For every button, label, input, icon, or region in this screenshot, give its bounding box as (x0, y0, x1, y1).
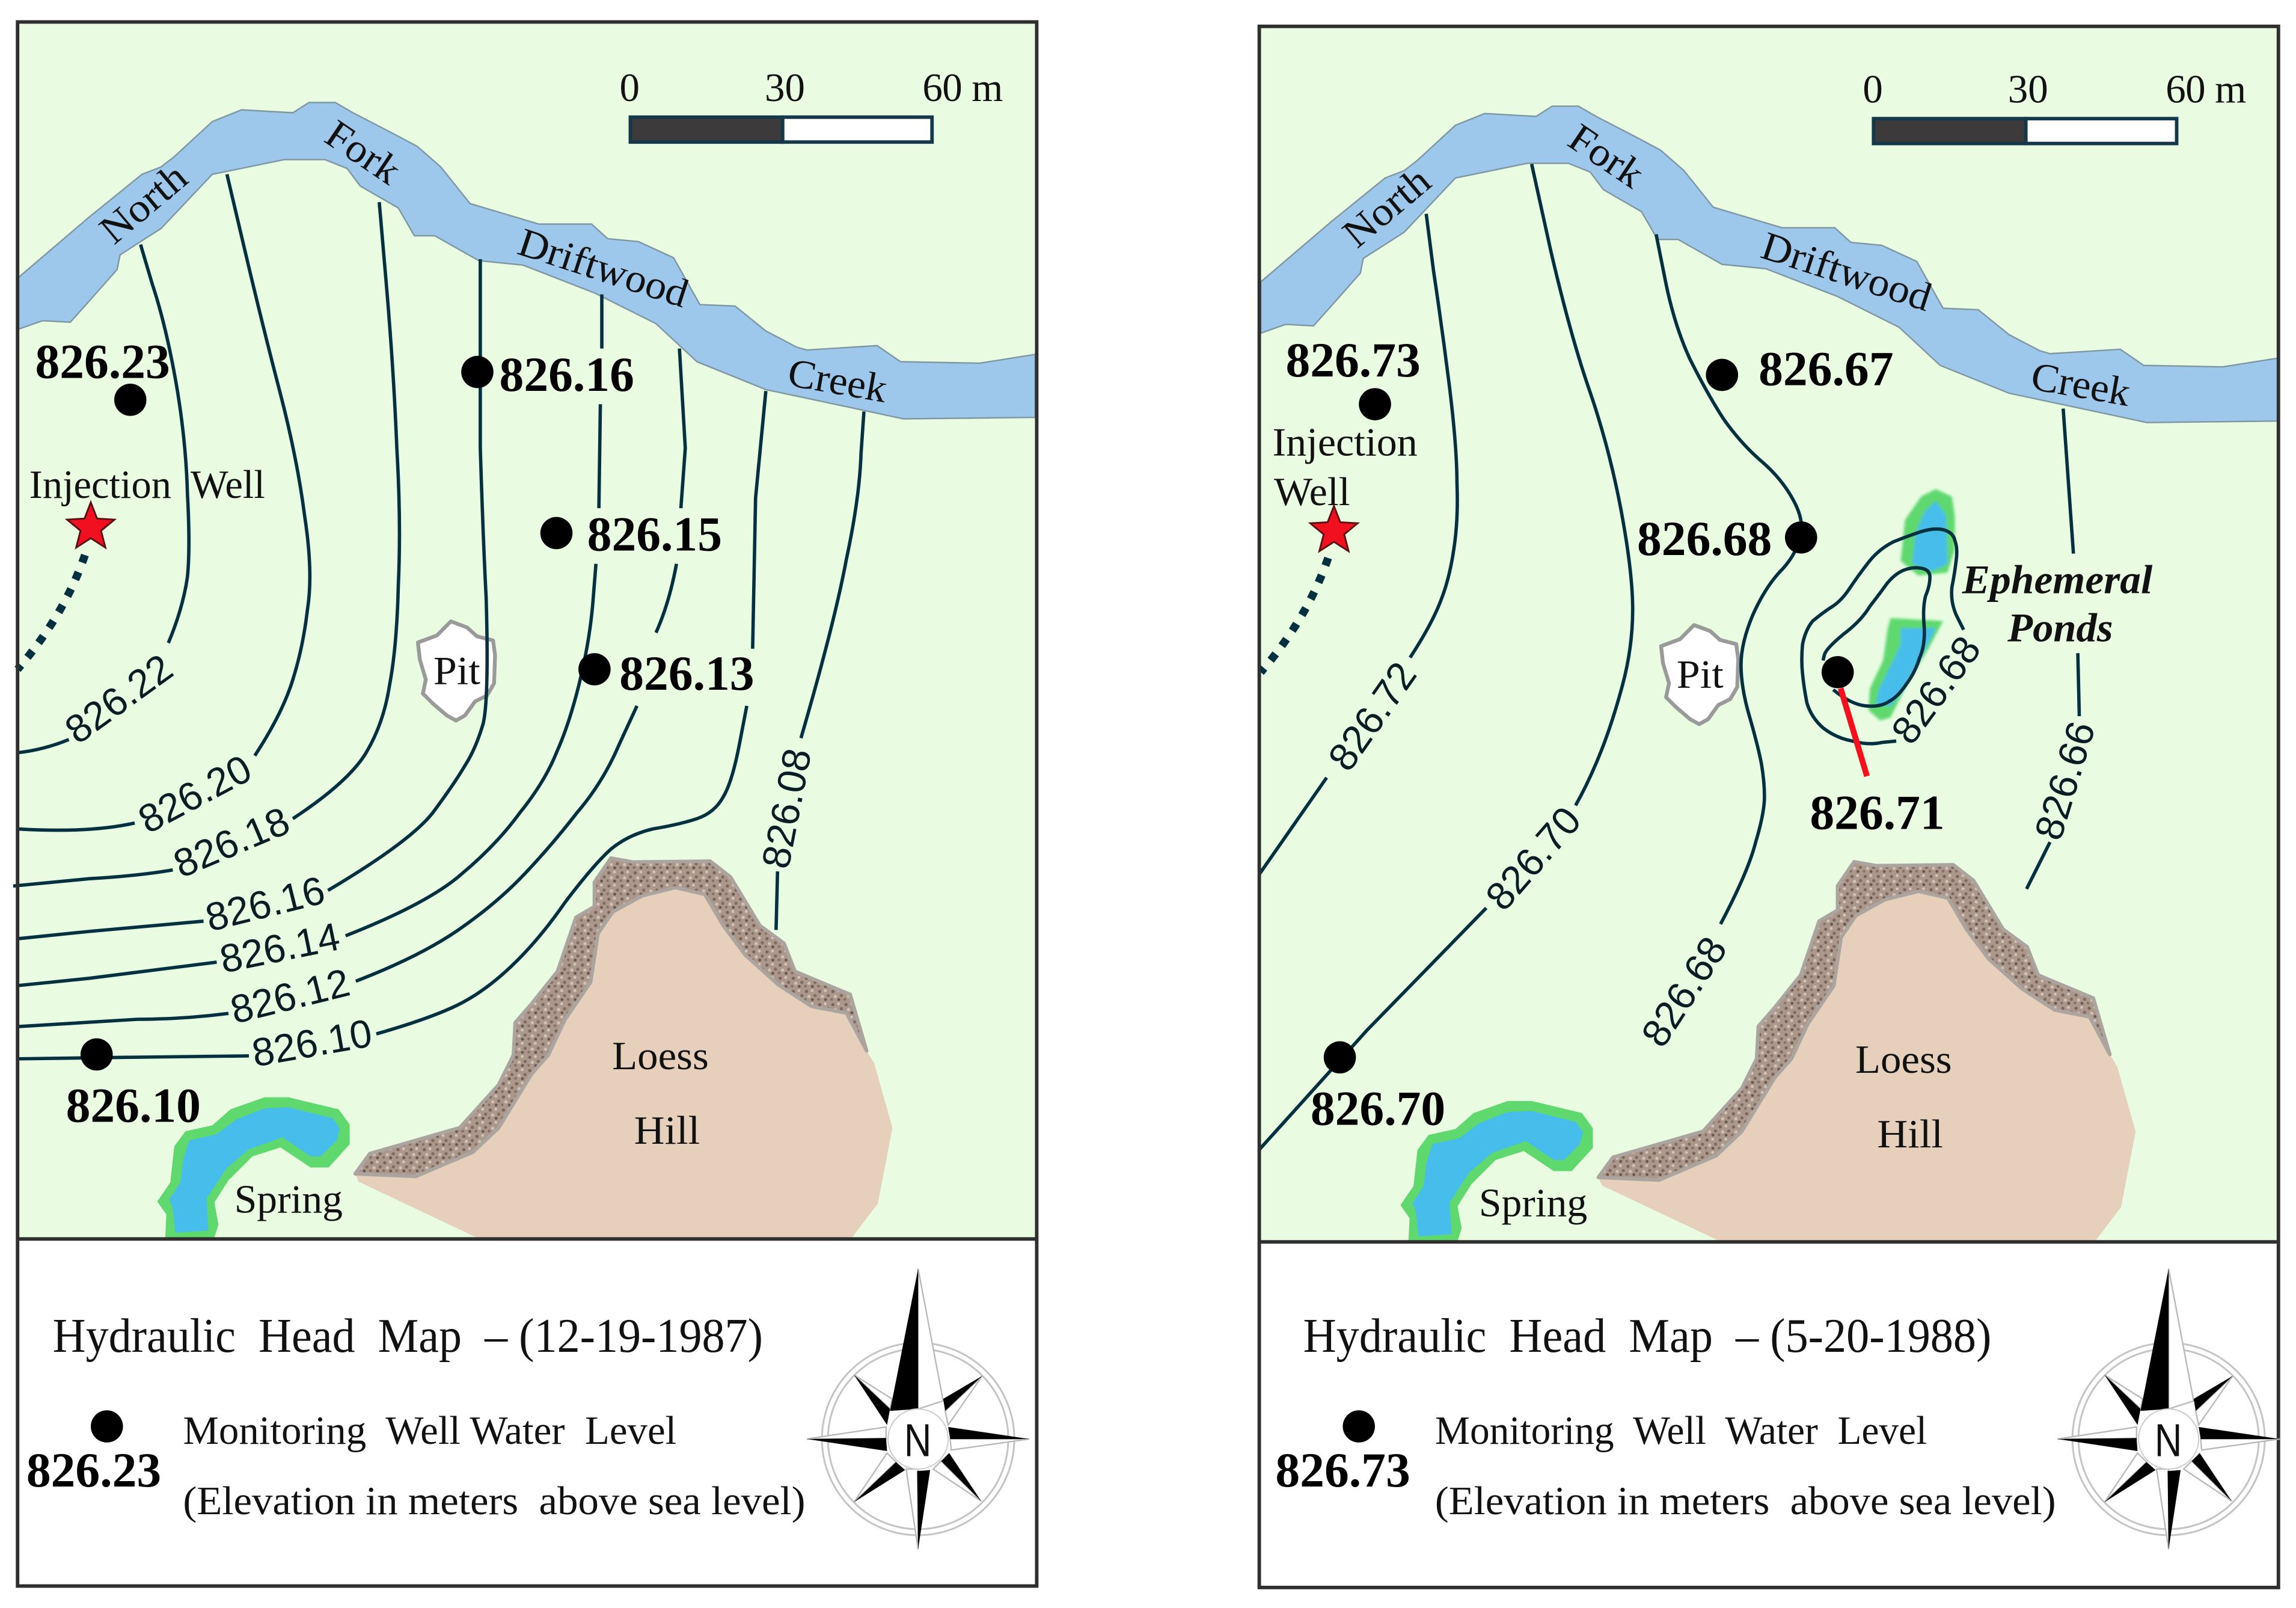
scale bar right (1863, 67, 2246, 144)
well readings left: 826.10 (66, 1078, 201, 1132)
contour labels left (57, 645, 819, 1075)
spring left (158, 1097, 350, 1238)
panel frame left (17, 22, 1036, 1586)
legend panel right: 826.73 (1275, 1443, 1410, 1497)
scale bar right: 30 (2008, 67, 2048, 111)
river: North Fork Driftwood Creek right: Fork (1561, 115, 1653, 197)
map background left (17, 22, 1036, 1239)
scale bar left (620, 66, 1003, 142)
injection well right (1261, 420, 1418, 672)
legend panel right: Hydraulic Head Map – (5-20-1988) (1303, 1309, 1991, 1363)
loess hill left: Hill (634, 1108, 700, 1153)
well readings right: 826.67 (1759, 341, 1893, 396)
label: ephemeral ponds: Ponds (2007, 605, 2113, 651)
contour labels left: 826.16 (201, 867, 329, 940)
contour labels right: 826.66 (2025, 716, 2104, 845)
loess hill right: Hill (1877, 1112, 1943, 1156)
spring right (1400, 1101, 1593, 1241)
contour labels right (1319, 628, 2104, 1054)
contour lines left (13, 174, 864, 1059)
well readings left: 826.16 (500, 347, 634, 402)
spring left: Spring (234, 1177, 343, 1221)
well readings left: 826.23 (35, 334, 170, 388)
river: North Fork Driftwood Creek right (1261, 106, 2279, 423)
pit right: Pit (1677, 652, 1724, 696)
river: North Fork Driftwood Creek left: Fork (317, 111, 409, 194)
ephemeral ponds (1869, 489, 1955, 720)
contour labels right: 826.68 (1632, 928, 1736, 1054)
contour labels left: 826.10 (248, 1010, 375, 1075)
spring right: Spring (1479, 1181, 1587, 1226)
legend panel right: (Elevation in meters above sea level) (1435, 1479, 2056, 1523)
contour labels left: 826.18 (167, 798, 296, 886)
label: ephemeral ponds: Ephemeral (1962, 556, 2152, 602)
well readings left: 826.13 (619, 646, 755, 701)
well readings right: 826.70 (1311, 1081, 1445, 1135)
river: North Fork Driftwood Creek left: Creek (785, 350, 891, 411)
well readings right: 826.73 (1285, 333, 1421, 387)
icon: compass rose left (807, 1269, 1029, 1549)
loess hill right: Loess (1855, 1037, 1952, 1082)
injection well left: Injection Well (29, 462, 265, 507)
contour lines right (1260, 164, 2080, 1150)
river: North Fork Driftwood Creek right: Driftwood (1756, 223, 1937, 320)
well readings left (35, 334, 755, 1132)
scale bar right: 60 m (2166, 67, 2246, 111)
injection well right: Well (1274, 470, 1350, 514)
contour labels left: 826.08 (753, 745, 819, 872)
injection well left (17, 462, 265, 669)
legend panel left (17, 1239, 1036, 1586)
pit right (1661, 625, 1738, 724)
injection well right: Injection (1273, 420, 1418, 464)
label: ephemeral ponds (1962, 556, 2152, 651)
legend panel left: (Elevation in meters above sea level) (183, 1479, 806, 1523)
icon: compass rose right: N (2155, 1415, 2182, 1466)
scale bar left: 30 (765, 66, 805, 110)
icon: compass rose right (2057, 1269, 2280, 1549)
pit left: Pit (433, 648, 480, 693)
loess hill left (355, 858, 892, 1238)
legend panel right (1260, 1242, 2279, 1588)
scale bar left: 60 m (922, 66, 1003, 110)
contour labels left: 826.20 (131, 746, 259, 842)
contour labels right: 826.72 (1319, 654, 1425, 778)
river: North Fork Driftwood Creek right: Creek (2028, 354, 2134, 415)
pit left (418, 621, 495, 720)
panel: left map 12-19-1987 (13, 22, 1036, 1586)
river: North Fork Driftwood Creek left: Driftwood (513, 219, 694, 316)
contour labels left: 826.14 (216, 913, 343, 981)
loess hill left: Loess (612, 1034, 709, 1078)
well readings right: 826.71 (1810, 785, 1945, 839)
river: North Fork Driftwood Creek right: North (1334, 158, 1439, 256)
loess hill right (1598, 862, 2135, 1241)
icon: compass rose left: N (904, 1415, 931, 1466)
legend panel right: Monitoring Well Water Level (1435, 1408, 1927, 1453)
contour labels right: 826.70 (1477, 798, 1590, 918)
contour labels left: 826.12 (226, 960, 354, 1032)
red leader line (1841, 689, 1867, 776)
legend panel left: 826.23 (26, 1443, 161, 1497)
well readings right: 826.68 (1637, 511, 1772, 566)
panel: right map 5-20-1988 (1260, 26, 2280, 1588)
well readings right (1285, 333, 1945, 1135)
legend panel left: Hydraulic Head Map – (12-19-1987) (53, 1309, 763, 1363)
contour labels left: 826.22 (57, 645, 180, 752)
map background right (1260, 26, 2279, 1242)
river: North Fork Driftwood Creek left (17, 102, 1035, 419)
legend panel left: Monitoring Well Water Level (183, 1408, 676, 1453)
panel frame right (1260, 26, 2279, 1588)
scale bar left: 0 (620, 66, 640, 110)
river: North Fork Driftwood Creek left: North (91, 155, 196, 253)
scale bar right: 0 (1863, 67, 1883, 111)
contour labels right: 826.68 (1882, 628, 1989, 752)
well readings left: 826.15 (587, 507, 722, 562)
